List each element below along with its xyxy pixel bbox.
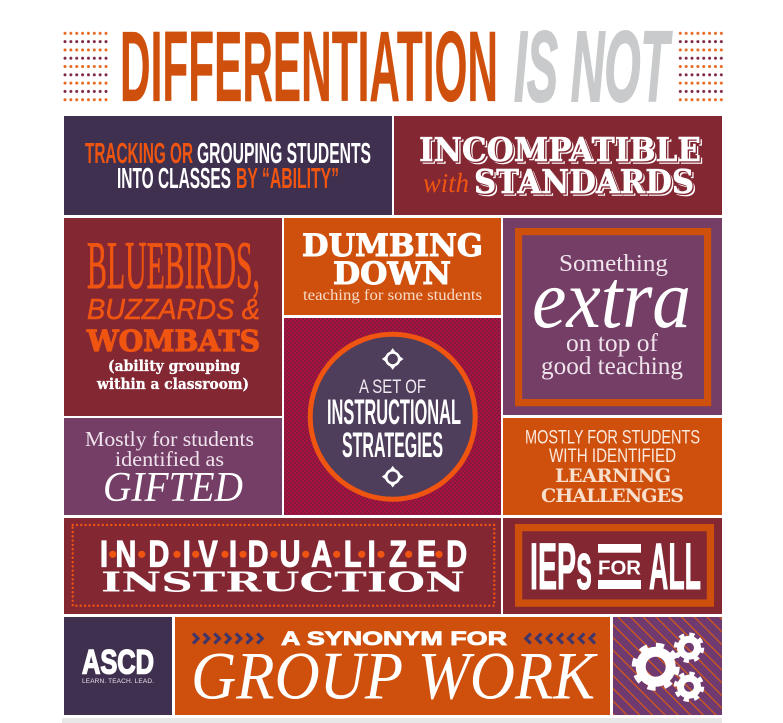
panel: instructional strategies: STRATEGIES <box>342 426 443 465</box>
text: BLUEBIRDS, <box>87 227 260 303</box>
panel: incompatible with standards <box>394 116 722 215</box>
text: instruction: INSTRUCTION <box>101 568 465 599</box>
text: tagline: LEARN. TEACH. LEAD. <box>82 678 154 685</box>
text: with: with <box>423 168 469 198</box>
panel: IEPs for all <box>503 518 722 614</box>
text: buzzards: BUZZARDS & <box>87 294 260 326</box>
panel: group work <box>175 617 610 715</box>
icon: crosshair top <box>383 349 403 369</box>
panel: learning challenges <box>503 418 722 515</box>
text: wombats: WOMBATS <box>86 324 260 358</box>
panel: dumbing down <box>284 218 501 315</box>
icon: crosshair bottom <box>383 467 403 487</box>
bars above and below for <box>598 544 641 589</box>
icon: chevrons right <box>193 634 262 644</box>
text: incompatible: INCOMPATIBLE <box>420 131 702 170</box>
text: teaching for some students: teaching for some students <box>303 287 482 304</box>
text: individualized: INDIVIDUALIZED <box>100 534 467 576</box>
panel: instructional strategies: INSTRUCTIONAL <box>327 393 461 432</box>
text: tracking or grouping students: GROUPING STUDENTS <box>197 138 371 170</box>
panel: individualized instruction <box>64 518 501 614</box>
text: standards: STANDARDS <box>474 162 694 201</box>
text: with identified: WITH IDENTIFIED <box>549 445 676 467</box>
panel: bluebirds <box>64 218 282 416</box>
circle badge <box>310 334 475 499</box>
dot grid left <box>62 31 109 102</box>
icon: large gear <box>635 646 677 688</box>
panel: gifted <box>64 418 282 515</box>
text: a set of: A SET OF <box>359 377 426 398</box>
orange separator dots <box>109 551 443 558</box>
text: standards: STANDARDS <box>476 164 696 204</box>
text: gifted: GIFTED <box>103 465 243 511</box>
panel: ASCD logo <box>64 617 172 715</box>
icon: chevrons left <box>526 634 595 644</box>
text: dumbing: DUMBING <box>302 228 483 264</box>
title <box>62 11 724 123</box>
text: incompatible: INCOMPATIBLE <box>419 130 701 169</box>
dotted border <box>73 525 494 606</box>
footer strip <box>62 718 722 723</box>
panel: instructional strategies <box>284 318 501 515</box>
panel: IEPs for all: IEPs <box>530 529 592 603</box>
text: identified as: identified as <box>115 447 224 471</box>
icon: small gear bottom <box>676 674 702 700</box>
frame <box>519 232 708 403</box>
text: into classes by ability: INTO CLASSES <box>117 163 231 195</box>
logo: ASCD: ASCD <box>82 644 154 682</box>
text: within a classroom: within a classroom) <box>96 376 249 393</box>
text: good teaching: good teaching <box>541 353 683 380</box>
text: something: Something <box>559 251 668 277</box>
text: group work: GROUP WORK <box>191 637 598 713</box>
text: tracking or grouping students: TRACKING OR <box>85 138 193 170</box>
text: incompatible: INCOMPATIBLE <box>422 132 704 172</box>
text: down: DOWN <box>333 256 451 292</box>
text: mostly for students: MOSTLY FOR STUDENTS <box>525 426 700 448</box>
dot grid right <box>677 31 724 102</box>
text: standards: STANDARDS <box>475 163 695 202</box>
text: on top of: on top of <box>566 330 659 357</box>
panel: gears <box>613 617 722 715</box>
text: extra: extra <box>532 253 691 346</box>
frame <box>519 528 710 603</box>
icon: small gear top <box>676 635 702 661</box>
text: mostly for students: Mostly for students <box>85 427 254 451</box>
text: a synonym for: A SYNONYM FOR <box>281 629 507 650</box>
text: for: FOR <box>598 557 642 579</box>
panel: tracking <box>64 116 392 215</box>
text: learning: LEARNING <box>555 465 671 487</box>
text: challenges: CHALLENGES <box>541 485 684 507</box>
panel: something extra <box>503 218 722 415</box>
text: into classes by ability: BY “ABILITY” <box>236 163 339 195</box>
text: ability grouping: (ability grouping <box>108 358 240 375</box>
panel: IEPs for all: ALL <box>649 529 701 603</box>
